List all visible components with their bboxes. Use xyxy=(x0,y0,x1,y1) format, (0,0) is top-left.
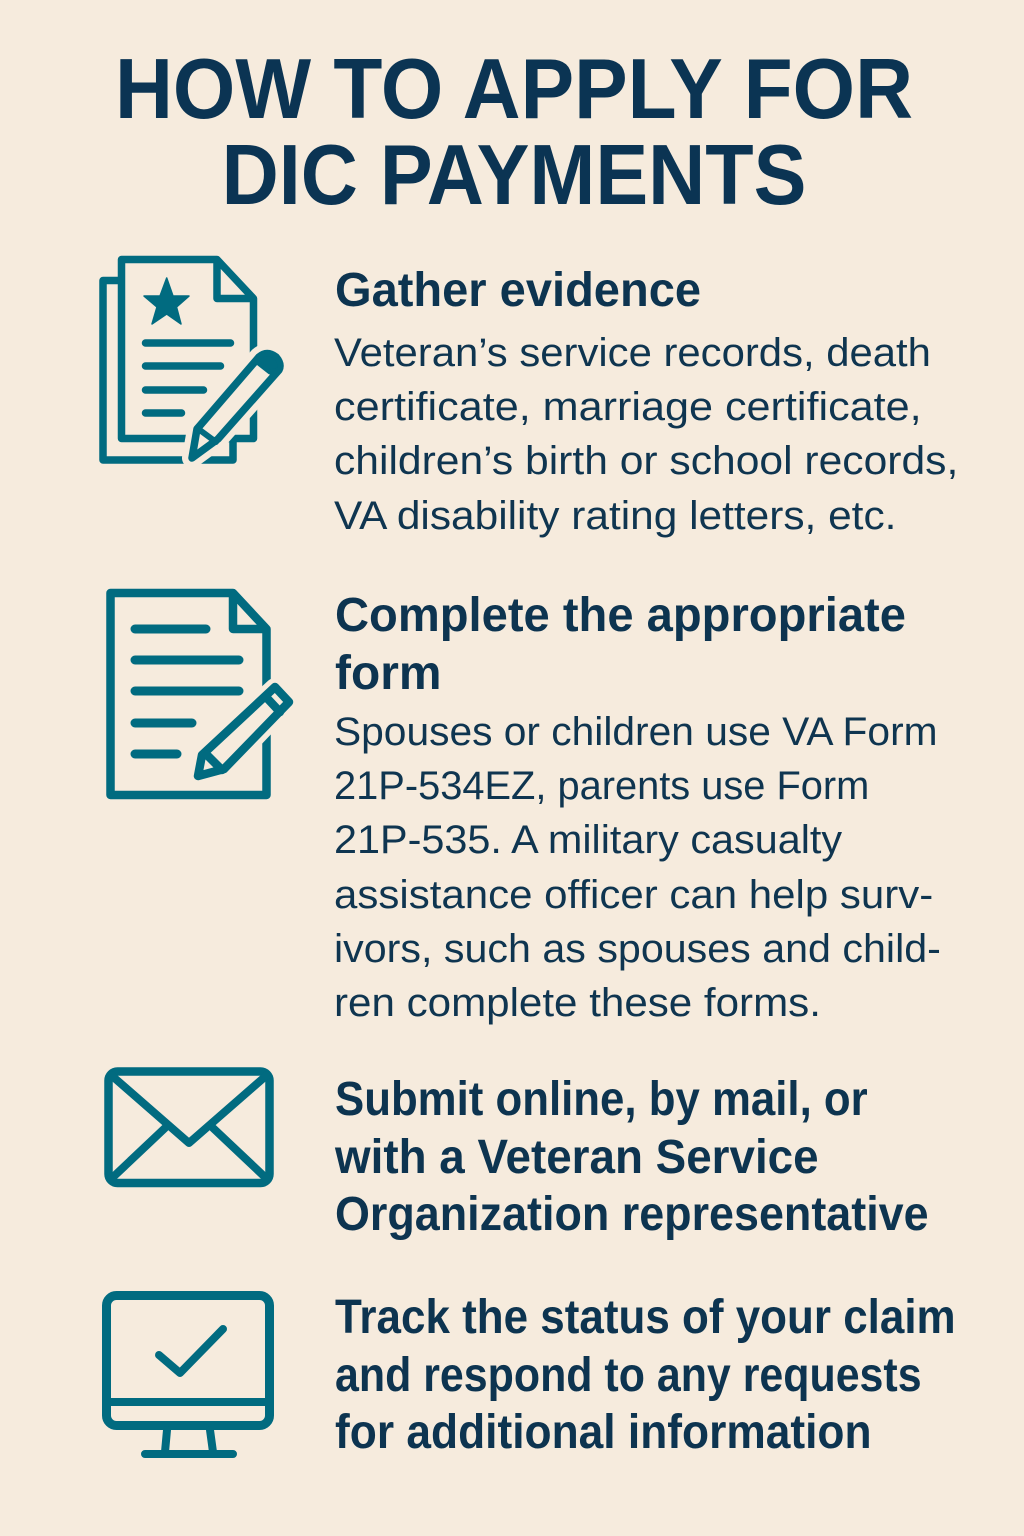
step 2 text: ren complete these forms. xyxy=(334,981,821,1025)
step 1 heading: Gather evidence xyxy=(335,264,701,317)
step 1 text: VA disability rating letters, etc. xyxy=(334,494,896,538)
step 1 text: Veteran’s service records, death xyxy=(334,331,931,375)
step 2 text: 21P-535. A military casualty xyxy=(334,818,842,862)
step 3 heading: Organization representative xyxy=(335,1188,929,1241)
step 2 heading: Complete the appropriate xyxy=(335,589,906,642)
step 2 text xyxy=(334,710,941,1025)
step 2 text: 21P-534EZ, parents use Form xyxy=(334,764,869,808)
step 1 text: certificate, marriage certificate, xyxy=(334,385,922,429)
step 4 heading: for additional information xyxy=(335,1406,872,1459)
title: HOW TO APPLY FOR xyxy=(114,42,913,137)
step 4 heading xyxy=(335,1291,956,1459)
step 1 text xyxy=(334,331,958,538)
icon: computer monitor with check xyxy=(102,1291,274,1458)
icon: form with pencil xyxy=(106,588,294,800)
title: DIC PAYMENTS xyxy=(221,128,806,223)
step 2 heading: form xyxy=(335,646,441,700)
step 4 heading: Track the status of your claim xyxy=(335,1291,956,1344)
icon: envelope xyxy=(104,1067,274,1188)
step 3 heading: with a Veteran Service xyxy=(335,1130,819,1184)
step 2 text: Spouses or children use VA Form xyxy=(334,710,938,754)
title xyxy=(114,42,913,223)
icon: documents with star and pencil xyxy=(99,256,284,464)
step 2 text: assistance officer can help surv- xyxy=(334,873,933,917)
step 1 text: children’s birth or school records, xyxy=(334,439,958,483)
step 2 text: ivors, such as spouses and child- xyxy=(334,927,941,971)
step 2 heading xyxy=(335,589,906,700)
step 4 heading: and respond to any requests xyxy=(335,1348,922,1402)
step 3 heading xyxy=(334,1073,929,1241)
step 3 heading: Submit online, by mail, or xyxy=(335,1073,868,1126)
